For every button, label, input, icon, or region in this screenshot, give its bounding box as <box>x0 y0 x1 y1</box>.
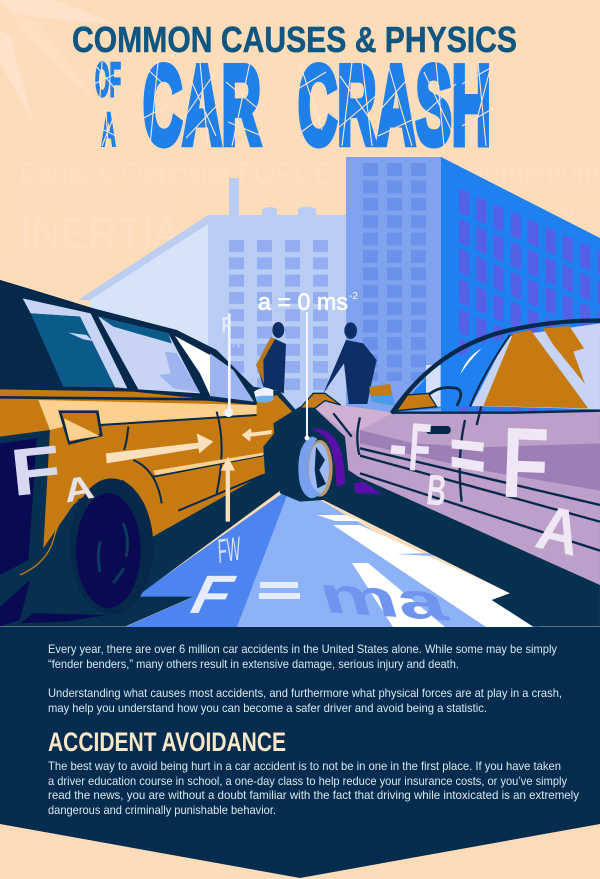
body lines <box>333 405 600 551</box>
background physics words: INERTIA <box>20 209 181 258</box>
equation F large: F <box>500 407 550 520</box>
ma: ma <box>311 566 455 632</box>
body darker band <box>360 430 600 491</box>
cream stripe <box>38 400 257 430</box>
intro paragraph two <box>48 686 562 715</box>
rear window frame <box>23 298 127 388</box>
force label FA large: F <box>7 432 65 511</box>
force label FB: F <box>274 423 281 439</box>
vertical force arrow <box>221 457 235 522</box>
mid window reflection <box>159 352 200 393</box>
wheel <box>76 493 141 608</box>
tall side <box>441 157 600 420</box>
tall facade <box>346 157 442 417</box>
force label FW: FW <box>215 531 244 571</box>
windows <box>229 240 329 390</box>
equals sign <box>259 582 300 599</box>
body paragraph <box>48 759 579 817</box>
road base <box>237 488 540 627</box>
shattered glass cracks <box>94 62 494 146</box>
building: centre <box>208 178 346 435</box>
intro paragraph two: Understanding what causes most accidents, and furthermore what physical forces are at play in a crash, <box>48 686 562 700</box>
road stripe shadow <box>396 553 450 557</box>
wheel highlights <box>98 523 127 583</box>
car silhouette <box>0 280 310 627</box>
body paragraph: read the news, you are without a doubt familiar with the fact that driving while intoxicated is an extremely <box>48 788 579 802</box>
handle highlight <box>64 418 100 441</box>
sill line <box>392 411 600 413</box>
gold trim curve <box>20 500 78 575</box>
background physics words: Acceleration Velocity Friction Mass Energy Gravity <box>20 190 311 200</box>
mirror <box>254 388 273 403</box>
normal force dot <box>224 408 233 417</box>
front fender <box>300 393 341 408</box>
title: of a car crash: OF <box>95 54 121 107</box>
equation: F = ma <box>180 566 455 632</box>
equation equals <box>452 439 484 472</box>
background physics words <box>8 158 600 289</box>
building: tall front <box>346 157 600 420</box>
background physics words: Kinetic Energy <box>8 255 129 272</box>
intro paragraph two: may help you understand how you can become a safer driver and avoid being a statistic. <box>48 701 487 715</box>
car: purple right <box>273 321 600 627</box>
rear window reflection <box>68 333 102 350</box>
wheel arch <box>70 478 153 615</box>
roof line <box>392 321 600 413</box>
rear dark panel <box>0 438 37 575</box>
highlight line <box>153 453 263 475</box>
front window blue <box>210 353 254 402</box>
person right <box>323 322 377 404</box>
rear window <box>472 323 600 409</box>
head <box>272 322 284 338</box>
seat <box>397 393 437 411</box>
heading: accident avoidance: ACCIDENT AVOIDANCE <box>48 727 286 757</box>
chimney <box>229 178 239 218</box>
door and body lines <box>100 412 265 511</box>
body paragraph: The best way to avoid being hurt in a car accident is to not be in one in the first place. If you have taken <box>48 759 561 773</box>
mirror <box>369 384 395 406</box>
pillar line <box>470 335 510 407</box>
force label FN: F <box>222 312 231 337</box>
background physics words: Velocity <box>20 274 91 289</box>
upper dark roof <box>0 280 253 397</box>
building: left wedge edge <box>78 215 208 300</box>
hood highlight <box>315 402 393 432</box>
sun rays <box>0 0 115 122</box>
front window white <box>175 336 210 395</box>
roof bumps <box>262 206 316 216</box>
car: gold left <box>0 280 310 627</box>
person left <box>256 322 286 393</box>
background physics words: Equal & Opposite FORCE <box>20 158 332 190</box>
tall windows <box>363 163 426 381</box>
gold arrow <box>106 433 213 463</box>
title: common causes and physics: COMMON CAUSES & PHYSICS <box>72 19 517 60</box>
purple patch <box>353 482 382 494</box>
force label A: A <box>61 469 97 511</box>
force label N: N <box>232 337 241 351</box>
body <box>315 402 600 585</box>
rear window glass <box>31 313 115 387</box>
equation minus <box>391 445 405 455</box>
equation A: A <box>530 492 587 570</box>
equation F: F <box>180 566 244 625</box>
facade <box>208 215 346 435</box>
steering wheel <box>428 387 461 406</box>
glass glint <box>460 348 482 375</box>
equation: zero acceleration: a = 0 ms <box>258 289 348 316</box>
road dark lane <box>125 488 290 627</box>
body <box>323 340 377 404</box>
body <box>257 337 286 393</box>
body <box>0 389 302 548</box>
rear orange triangle <box>483 330 588 408</box>
title: of a car crash <box>94 43 494 168</box>
acceleration dot <box>304 436 310 440</box>
highlight <box>256 337 275 384</box>
title: of a car crash: CAR <box>143 43 261 168</box>
mid window tint <box>99 317 172 343</box>
mid window <box>98 317 200 393</box>
front wheel face <box>298 437 320 498</box>
intro paragraph one <box>48 642 557 671</box>
title: of a car crash: A <box>101 104 116 157</box>
lower dark panel <box>0 580 30 627</box>
head <box>344 322 357 339</box>
intro paragraph one: “fender benders,” many others result in extensive damage, serious injury and death. <box>48 657 459 671</box>
mirror glass <box>256 396 273 403</box>
orange bolt <box>543 326 585 384</box>
wheel spokes <box>315 447 326 488</box>
superscript: -2 <box>349 291 358 302</box>
acceleration line <box>306 312 308 437</box>
under-car dark streak <box>20 613 107 623</box>
body paragraph: a driver education course in school, a one-day class to help reduce your insurance costs, or you’ve simply <box>48 774 567 788</box>
building: left wedge <box>90 224 208 420</box>
road <box>125 488 540 627</box>
road stripes <box>317 515 533 627</box>
background physics words: Momentum <box>462 158 600 188</box>
equation F: F <box>407 409 433 486</box>
wheel inner <box>309 443 329 494</box>
normal force line <box>228 313 231 413</box>
wheel rim <box>307 440 333 497</box>
windshield <box>395 337 507 412</box>
intro paragraph one: Every year, there are over 6 million car accidents in the United States alone. While some may be simply <box>48 642 557 656</box>
dark text panel <box>0 627 600 878</box>
navy shadow and wheel well <box>273 407 600 627</box>
mirror cap <box>369 384 392 396</box>
door handle <box>60 412 101 443</box>
side windows <box>455 180 600 420</box>
wheel arch purple <box>312 428 345 487</box>
arrow force small <box>242 428 272 442</box>
equation B: B <box>424 466 449 516</box>
door handle <box>426 426 451 434</box>
body paragraph: dangerous and criminally punishable behavior. <box>48 803 276 817</box>
building seen through glass <box>426 365 441 407</box>
sill dark line <box>0 397 257 404</box>
